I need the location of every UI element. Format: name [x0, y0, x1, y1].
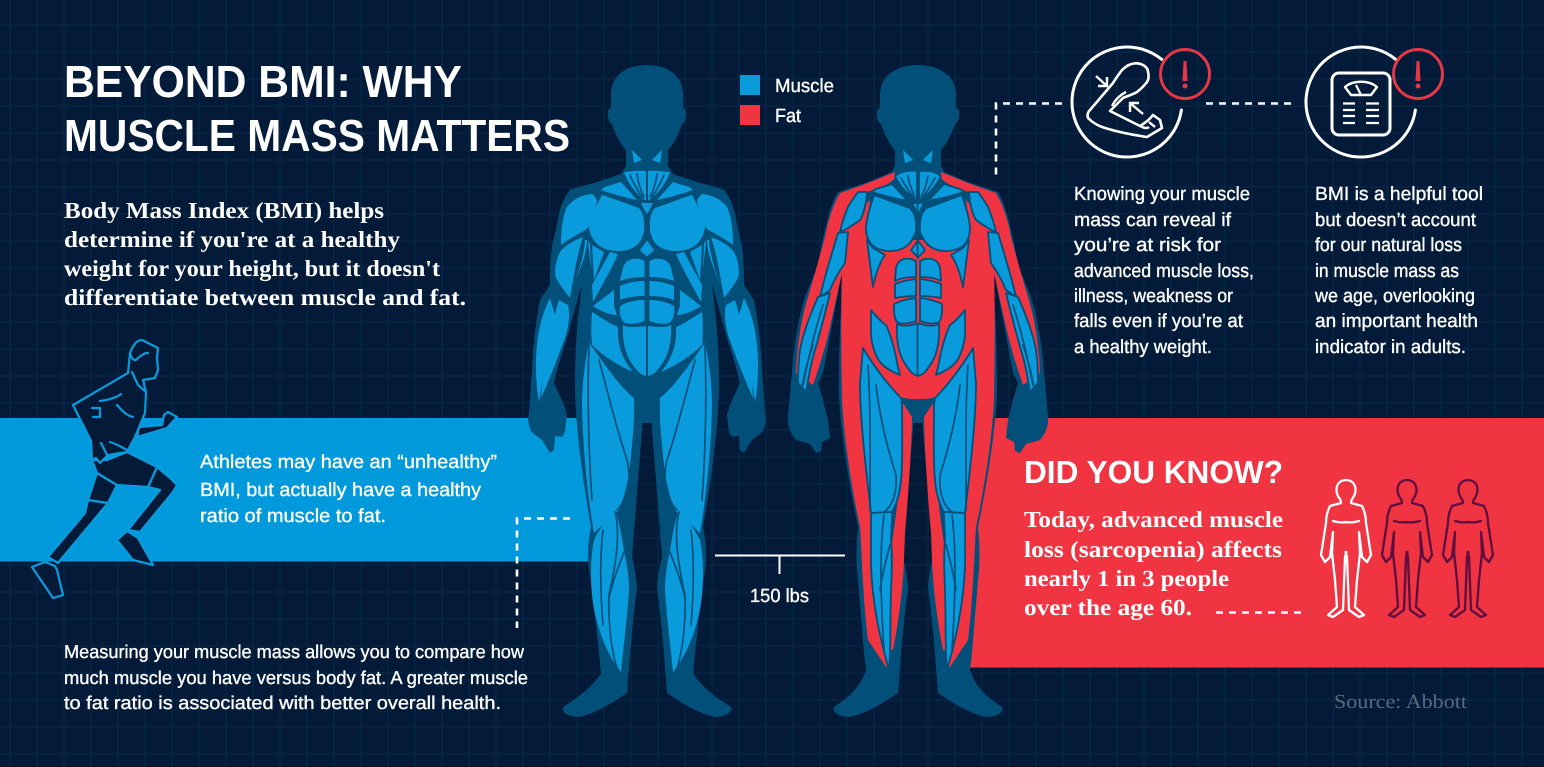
red band — [960, 418, 1544, 668]
text: knowing your muscle mass: a healthy weight. — [1074, 337, 1212, 358]
muscle measuring text: much muscle you have versus body fat. A greater muscle — [64, 667, 528, 688]
did you know heading: DID YOU KNOW? — [1024, 454, 1283, 490]
intro text: determine if you're at a healthy — [64, 227, 401, 252]
blue band — [0, 418, 600, 562]
intro text: differentiate between muscle and fat. — [64, 285, 466, 310]
text: BMI is a helpful tool: we age, overlooking — [1314, 286, 1475, 307]
did you know text — [1024, 507, 1283, 621]
text: BMI is a helpful tool: but doesn’t account — [1315, 210, 1477, 231]
text: knowing your muscle mass: you’re at risk for — [1074, 235, 1222, 256]
athletes text: BMI, but actually have a healthy — [200, 480, 482, 501]
did you know text: Today, advanced muscle — [1024, 507, 1283, 532]
muscle measuring text — [64, 641, 528, 713]
icon: three people — [1321, 480, 1493, 617]
did you know text: nearly 1 in 3 people — [1024, 566, 1229, 591]
legend — [740, 75, 834, 127]
intro text — [64, 198, 466, 310]
figure: lean body — [528, 65, 766, 717]
dashed connector: between icons — [1206, 102, 1296, 105]
figure: body with fat — [788, 65, 1048, 717]
did you know text: loss (sarcopenia) affects — [1024, 537, 1282, 562]
did you know text: over the age 60. — [1024, 595, 1192, 621]
title: BEYOND BMI: WHY — [64, 56, 462, 107]
dashed connector: right figure to arm icon — [996, 104, 1062, 178]
text: BMI is a helpful tool: in muscle mass as — [1315, 261, 1459, 282]
text: knowing your muscle mass: falls even if you’re at — [1074, 311, 1244, 332]
text: knowing your muscle mass: advanced muscle loss, — [1074, 261, 1254, 282]
muscle measuring text: Measuring your muscle mass allows you to compare how — [64, 641, 525, 662]
dashed connector: left — [517, 518, 570, 628]
text: knowing your muscle mass: illness, weakness or — [1074, 286, 1234, 307]
intro text: Body Mass Index (BMI) helps — [64, 198, 384, 223]
muscle measuring text: to fat ratio is associated with better overall health. — [64, 692, 501, 713]
legend: Fat — [775, 106, 802, 127]
icon: scale with alert — [1306, 47, 1442, 157]
title: MUSCLE MASS MATTERS — [64, 110, 570, 161]
source: Source: Abbott — [1334, 691, 1467, 713]
weight marker: 150 lbs — [715, 556, 845, 607]
text: BMI is a helpful tool: an important health — [1315, 311, 1478, 332]
legend: Muscle — [775, 76, 834, 97]
athletes text: Athletes may have an “unhealthy” — [200, 452, 497, 473]
text: knowing your muscle mass: Knowing your muscle — [1074, 184, 1250, 205]
athletes text: ratio of muscle to fat. — [200, 506, 386, 527]
text: knowing your muscle mass: mass can reveal if — [1074, 210, 1232, 231]
text: knowing your muscle mass — [1074, 184, 1254, 358]
athletes text — [200, 452, 497, 527]
icon: runner — [32, 340, 177, 598]
weight marker: 150 lbs: 150 lbs — [750, 586, 809, 607]
dashed connector: red panel — [1216, 611, 1307, 614]
text: BMI is a helpful tool: BMI is a helpful tool — [1315, 184, 1483, 205]
text: BMI is a helpful tool: for our natural loss — [1315, 235, 1462, 256]
title — [64, 56, 570, 161]
intro text: weight for your height, but it doesn't — [64, 256, 440, 282]
icon: arm with alert — [1072, 47, 1210, 157]
text: BMI is a helpful tool — [1314, 184, 1483, 358]
text: BMI is a helpful tool: indicator in adults. — [1315, 337, 1466, 358]
